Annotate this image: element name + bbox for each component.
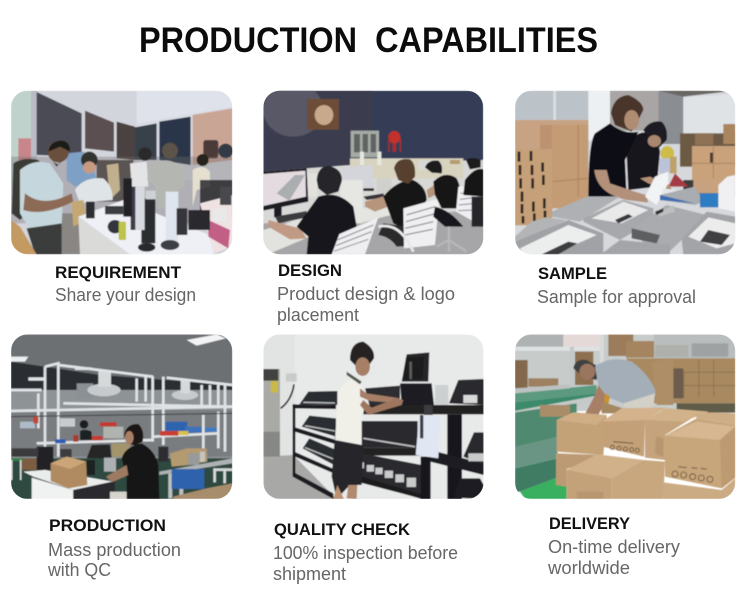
cartons left	[515, 120, 588, 150]
people behind	[80, 430, 92, 440]
text: product design and logo placement	[277, 284, 455, 325]
text: on-time delivery worldwide: worldwide	[547, 558, 630, 578]
man	[332, 435, 363, 499]
background people	[67, 152, 97, 187]
panel: requirement photo	[11, 91, 233, 254]
caption: sample	[537, 264, 696, 307]
blue boxes	[660, 187, 704, 205]
person 2	[365, 195, 390, 212]
woman	[75, 178, 113, 203]
heading: sample: SAMPLE	[538, 264, 607, 283]
text: 100% inspection before shipment: 100% inspection before	[273, 543, 458, 563]
text: on-time delivery worldwide: On-time delivery	[548, 537, 680, 557]
person 1	[268, 220, 307, 239]
person 3	[427, 183, 437, 198]
text: mass production with qc	[47, 540, 181, 580]
panel: delivery photo	[515, 334, 735, 499]
conveyor	[515, 385, 597, 402]
panel: production photo	[11, 334, 232, 499]
caption: requirement	[55, 263, 196, 305]
text: 100% inspection before shipment	[273, 543, 458, 584]
paper	[645, 172, 668, 205]
heading: requirement: REQUIREMENT	[55, 263, 182, 282]
worker	[122, 443, 159, 499]
shelf frame	[293, 404, 295, 474]
clipboard	[414, 430, 440, 460]
right shelves	[363, 405, 484, 414]
foreground man	[12, 159, 43, 220]
caption: design	[277, 261, 455, 325]
caption: quality check	[273, 520, 458, 584]
text: mass production with qc: with QC	[47, 560, 111, 580]
text: on-time delivery worldwide	[547, 537, 680, 578]
right desk	[159, 458, 232, 475]
person 4	[463, 169, 483, 197]
panel: sample photo	[515, 91, 735, 254]
products	[141, 198, 155, 243]
person front	[588, 123, 638, 197]
heading: design: DESIGN	[278, 261, 342, 280]
text: sample for approval: Sample for approval	[537, 287, 696, 307]
shelf items	[166, 422, 187, 432]
caption: production	[47, 516, 181, 580]
text: mass production with qc: Mass production	[48, 540, 181, 560]
aluminium frames	[11, 363, 232, 475]
person back	[627, 132, 660, 190]
caption: delivery	[547, 514, 680, 578]
title: PRODUCTION CAPABILITIES	[139, 21, 598, 60]
panel: quality check photo	[263, 334, 484, 499]
fans	[87, 384, 121, 396]
bench	[23, 470, 113, 490]
cartons	[557, 412, 607, 455]
grey boxes	[552, 197, 620, 222]
chair 3	[456, 185, 479, 222]
chair 2	[403, 198, 439, 248]
man	[585, 385, 606, 415]
text: product design and logo placement: placement	[277, 305, 359, 325]
heading: delivery: DELIVERY	[549, 514, 631, 533]
text: share your design: Share your design	[55, 285, 196, 305]
yellow flowers	[661, 146, 674, 161]
text: product design and logo placement: Product design & logo	[277, 284, 455, 304]
monitors	[263, 168, 308, 211]
table	[78, 200, 213, 254]
panel: design photo	[263, 83, 483, 254]
text: 100% inspection before shipment: shipment	[273, 564, 346, 584]
chair 1	[332, 217, 378, 254]
heading: quality check: QUALITY CHECK	[274, 520, 411, 539]
heading: production: PRODUCTION	[49, 516, 166, 535]
